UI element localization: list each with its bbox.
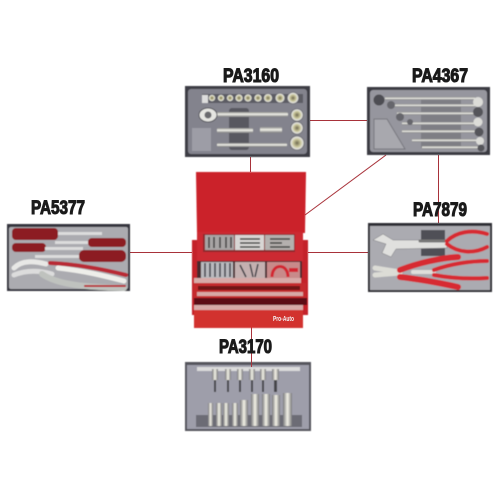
- wrenches: [385, 97, 480, 149]
- drawers: [194, 278, 301, 283]
- screwdrivers: [55, 232, 102, 235]
- panel: PA3160 socket set: [185, 66, 310, 157]
- panel: PA4367 wrench set: [367, 66, 490, 155]
- heading: PA7879: PA7879: [413, 200, 467, 221]
- open lid: [196, 172, 306, 233]
- heading: PA3170: PA3170: [219, 337, 272, 358]
- panel: PA5377 screwdrivers and pliers: [7, 198, 130, 291]
- tool chest: [192, 172, 308, 328]
- pliers: [14, 262, 126, 288]
- tray: [368, 223, 492, 292]
- tray: [185, 86, 310, 157]
- extension bars: [217, 128, 253, 133]
- logo: Pro-Auto: [273, 316, 294, 323]
- tray: [185, 362, 311, 431]
- chest body: [192, 240, 308, 315]
- connector over tray: [250, 362, 252, 367]
- adjustable wrench: [373, 234, 447, 257]
- ratchet: [214, 112, 288, 117]
- connector lines: [130, 120, 438, 364]
- tray: [367, 87, 490, 155]
- open drawer tools: [197, 261, 302, 278]
- heading: PA3160: PA3160: [223, 66, 279, 87]
- large sockets: [290, 108, 304, 122]
- red-handled pliers: [375, 232, 487, 287]
- panel: PA3170 deep sockets: [185, 362, 311, 431]
- panel: PA7879 pliers and adjustable wrench: [368, 200, 492, 292]
- heading: PA5377: PA5377: [31, 198, 85, 219]
- socket rail: [202, 94, 303, 103]
- heading: PA4367: PA4367: [412, 66, 468, 87]
- top tray: [203, 234, 295, 252]
- tray: [7, 224, 130, 291]
- bit sockets: [214, 378, 277, 392]
- deep sockets: [208, 393, 292, 426]
